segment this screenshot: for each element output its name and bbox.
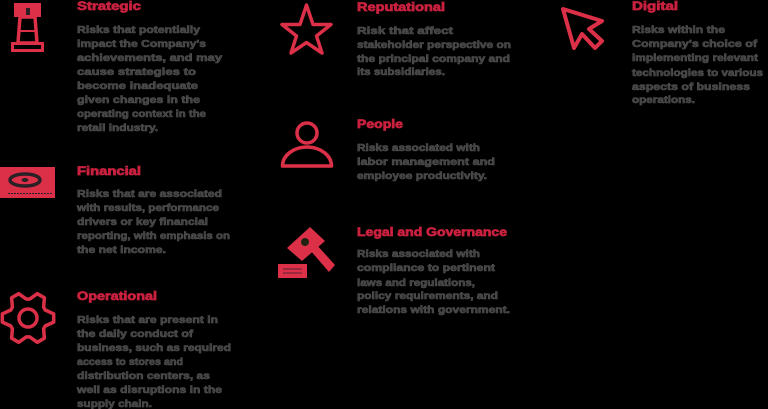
text block: digital: technologies to various: [632, 67, 763, 79]
icon: star: [282, 5, 331, 53]
icon: person: [282, 123, 332, 166]
text block: strategic: impact the Company's: [77, 38, 206, 50]
heading: financial: Financial: [77, 166, 141, 178]
text block: operational: well as disruptions in the: [76, 384, 222, 396]
text block: strategic: achievements, and may: [77, 52, 222, 64]
text block: reputational: the principal company and: [357, 53, 510, 65]
text block: legal and governance: policy requirements, and: [357, 290, 498, 302]
heading: reputational: Reputational: [357, 2, 445, 14]
heading: people: People: [357, 119, 403, 131]
text block: people: Risks associated with: [357, 142, 480, 154]
text block: digital: aspects of business: [632, 81, 750, 93]
text block: people: labor management and: [357, 156, 495, 168]
panel: operational: [2, 291, 231, 409]
icon: chess rook: [12, 3, 42, 50]
text block: operational: [76, 314, 231, 409]
panel: legal and governance: [278, 227, 510, 316]
text block: reputational: Risk that affect: [357, 25, 454, 37]
text block: strategic: become inadequate: [77, 80, 198, 92]
text block: digital: [632, 24, 763, 106]
text block: operational: business, such as required: [77, 342, 231, 354]
text block: financial: Risks that are associated: [77, 188, 222, 200]
text block: digital: implementing relevant: [632, 52, 759, 64]
text block: operational: access to stores and: [77, 356, 183, 368]
text block: financial: the net income.: [77, 244, 166, 256]
text block: legal and governance: relations with government.: [357, 304, 510, 316]
text block: financial: reporting, with emphasis on: [77, 230, 230, 242]
text block: digital: Risks within the: [632, 24, 725, 36]
text block: strategic: Risks that potentially: [77, 24, 200, 36]
text block: legal and governance: Risks associated with: [357, 248, 480, 260]
text block: legal and governance: compliance to pertinent: [357, 262, 496, 274]
text block: strategic: cause strategies to: [77, 66, 196, 78]
text block: operational: distribution centers, as: [77, 370, 210, 382]
heading: operational: Operational: [77, 291, 157, 303]
icon: cursor arrow: [563, 9, 602, 48]
text block: people: [357, 142, 495, 182]
text block: strategic: [77, 24, 222, 134]
panel: reputational: [282, 2, 511, 78]
text block: operational: the daily conduct of: [77, 328, 194, 340]
heading: digital: Digital: [632, 1, 678, 13]
panel: strategic: [12, 1, 222, 134]
panel: financial: [0, 166, 230, 256]
text block: reputational: [357, 25, 511, 78]
text block: financial: [76, 188, 230, 256]
panel: people: [282, 119, 495, 182]
text block: reputational: its subsidiaries.: [357, 66, 445, 78]
heading: strategic: Strategic: [77, 1, 142, 13]
text block: operational: Risks that are present in: [77, 314, 218, 326]
text block: strategic: retail industry.: [77, 122, 158, 134]
icon: banknote: [0, 167, 55, 198]
heading: legal and governance: Legal and Governance: [357, 227, 507, 239]
icon: gear: [2, 294, 54, 342]
text block: strategic: given changes in the: [77, 94, 200, 106]
text block: people: employee productivity.: [357, 170, 487, 182]
text block: legal and governance: laws and regulations,: [357, 277, 475, 289]
panel: digital: [563, 1, 763, 106]
text block: legal and governance: [357, 248, 510, 316]
text block: reputational: stakeholder perspective on: [357, 39, 511, 51]
icon: gavel: [278, 227, 335, 278]
text block: digital: operations.: [632, 94, 695, 106]
text block: financial: with results, performance: [76, 202, 219, 214]
text block: digital: Company's choice of: [632, 38, 758, 50]
text block: strategic: operating context in the: [77, 108, 206, 120]
text block: financial: drivers or key financial: [77, 216, 208, 228]
